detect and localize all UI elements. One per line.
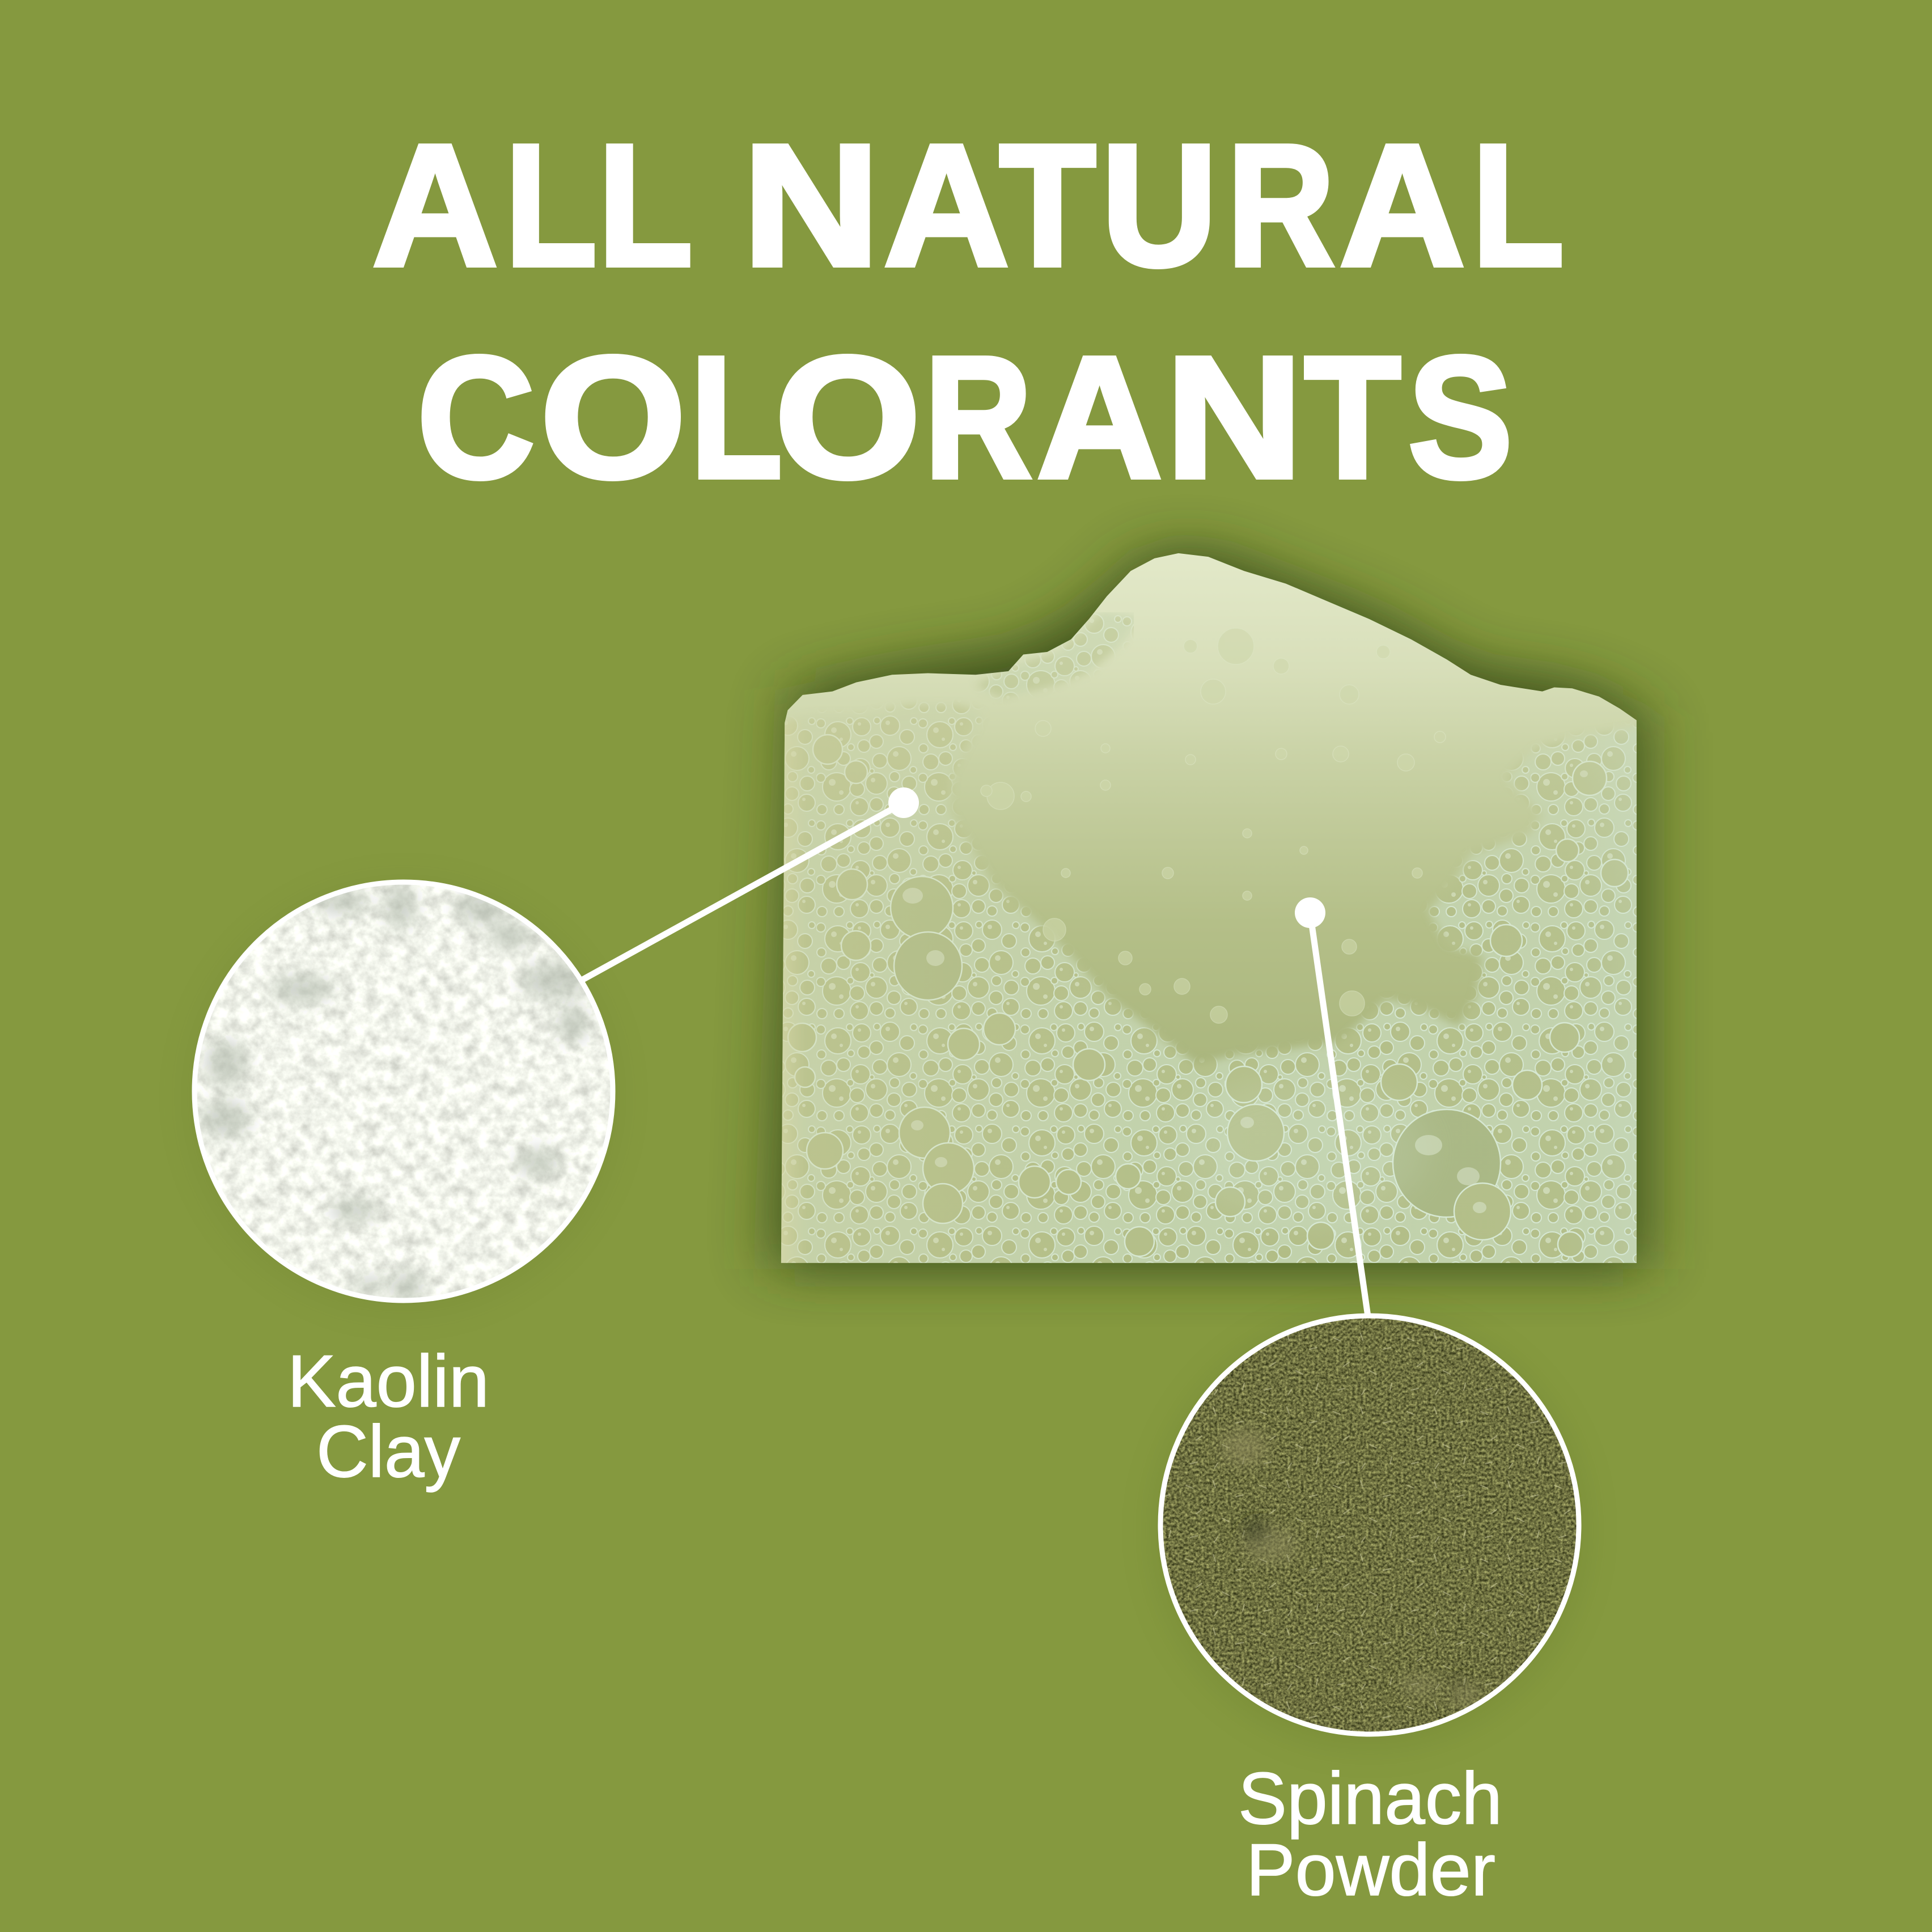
title: U [1101, 109, 1217, 302]
infographic canvas [192, 143, 1686, 1896]
title: N [743, 109, 880, 302]
label: Spinach Powder: Spinach [1238, 1757, 1502, 1840]
soap body [771, 544, 1644, 1276]
title: L [505, 109, 597, 302]
spinach powder photo circle [1158, 1313, 1582, 1737]
foam lather near peak [964, 612, 1134, 782]
soap drop shadow [781, 557, 1637, 1263]
title: R [925, 321, 1032, 514]
callout line: spinach powder [1310, 913, 1368, 1316]
spinach powder ring [1160, 1316, 1579, 1734]
foam lather lower region [771, 544, 1644, 1276]
soap bar photo [771, 544, 1644, 1276]
kaolin clay texture [193, 880, 615, 1304]
callout line: kaolin clay [582, 803, 904, 980]
title: N [1166, 321, 1303, 514]
small bubbles on smooth centre [981, 628, 1446, 1023]
title: T [999, 109, 1096, 302]
title: A [1037, 321, 1162, 514]
title: L [598, 109, 690, 302]
title: S [1408, 321, 1512, 514]
spinach powder circle shadow [1151, 1312, 1588, 1749]
label: Kaolin Clay [287, 1340, 489, 1493]
title: L [1472, 109, 1564, 302]
title: A [884, 109, 1009, 302]
title: R [1227, 109, 1334, 302]
spinach powder texture [1158, 1313, 1582, 1737]
title: L [690, 321, 782, 514]
kaolin clay ring [194, 882, 613, 1300]
kaolin clay photo circle [193, 880, 615, 1304]
label: Spinach Powder [1238, 1757, 1502, 1911]
label: Kaolin Clay: Kaolin [287, 1340, 489, 1422]
label: Spinach Powder: Powder [1246, 1828, 1495, 1911]
title [372, 109, 1564, 514]
label: Kaolin Clay: Clay [316, 1410, 460, 1493]
title: T [1304, 321, 1401, 514]
callout dot: kaolin clay [888, 787, 919, 818]
kaolin clay powder circle shadow [185, 879, 622, 1315]
title: O [775, 321, 921, 514]
title: A [1340, 109, 1465, 302]
title: A [372, 109, 498, 302]
callout dot: spinach powder [1295, 897, 1325, 928]
title: O [540, 321, 686, 514]
title: C [417, 321, 535, 514]
